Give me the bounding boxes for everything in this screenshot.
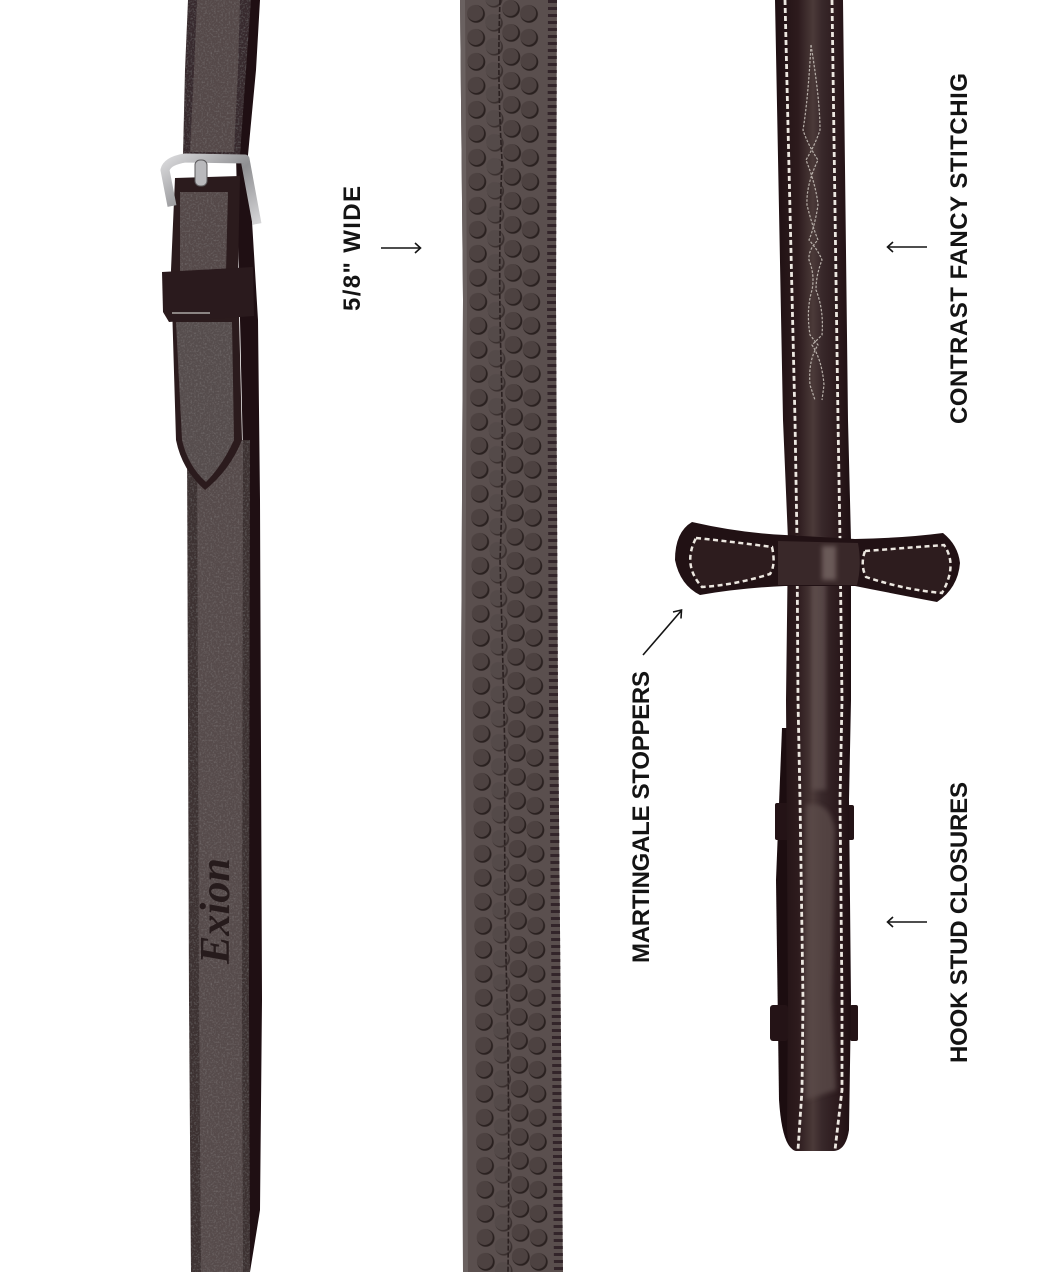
- strap upper face: [190, 0, 240, 152]
- label: contrast fancy stitching: CONTRAST FANCY STITCHIG: [946, 73, 973, 424]
- upper leather highlight: [812, 540, 826, 790]
- back strap of hook stud loop: [776, 728, 794, 1150]
- label: hook stud closures: HOOK STUD CLOSURES: [946, 782, 973, 1063]
- label: martingale stoppers: MARTINGALE STOPPERS: [628, 671, 655, 963]
- center loop band: [778, 541, 860, 585]
- hook stud keeper left upper: [775, 803, 789, 840]
- arrow: 5/8 wide: [381, 243, 420, 253]
- strap left edge: [460, 0, 468, 1272]
- label: 5/8 wide: 5/8" WIDE: [339, 186, 366, 311]
- strap main section: [187, 440, 250, 1272]
- strap body: [775, 0, 851, 1151]
- embossed logo: Exion: [193, 858, 239, 965]
- hook stud keeper right upper: [846, 805, 854, 840]
- lower leather highlight: [805, 804, 836, 1100]
- keeper highlight: [172, 312, 210, 314]
- hook stud keeper right lower: [850, 1005, 858, 1041]
- strap upper section: [183, 0, 251, 155]
- fancy contrast stitching: [803, 45, 824, 400]
- left wing stitching: [690, 538, 774, 587]
- strap dark back edge: [236, 0, 262, 1272]
- strap keeper loop: [162, 267, 254, 322]
- arrow: contrast fancy stitching: [888, 242, 927, 252]
- icon: metal buckle: [165, 158, 257, 224]
- grip dots: [465, 0, 554, 1272]
- panel: right strap with fancy stitching: [770, 0, 858, 1151]
- tongue strap lower face: [176, 322, 234, 482]
- edge stitching right: [832, 0, 842, 1150]
- edge stitching left: [785, 0, 803, 1150]
- band highlight: [822, 546, 836, 580]
- stopper leather: [675, 522, 960, 602]
- hook stud keeper left lower: [770, 1005, 788, 1041]
- arrow: martingale stoppers: [643, 610, 682, 655]
- strap main face: [197, 440, 243, 1272]
- right wing stitching: [863, 545, 951, 593]
- arrow: hook stud closures: [888, 917, 927, 927]
- center stitch line: [499, 0, 509, 1272]
- panel: martingale stopper: [675, 522, 960, 602]
- strap notched right edge: [547, 0, 563, 1272]
- panel: left strap with buckle: [162, 0, 262, 1272]
- tongue strap upper face: [180, 192, 228, 272]
- buckle tongue strap: [171, 176, 242, 490]
- panel: center rubber grip strap: [460, 0, 563, 1272]
- strap base: [460, 0, 563, 1272]
